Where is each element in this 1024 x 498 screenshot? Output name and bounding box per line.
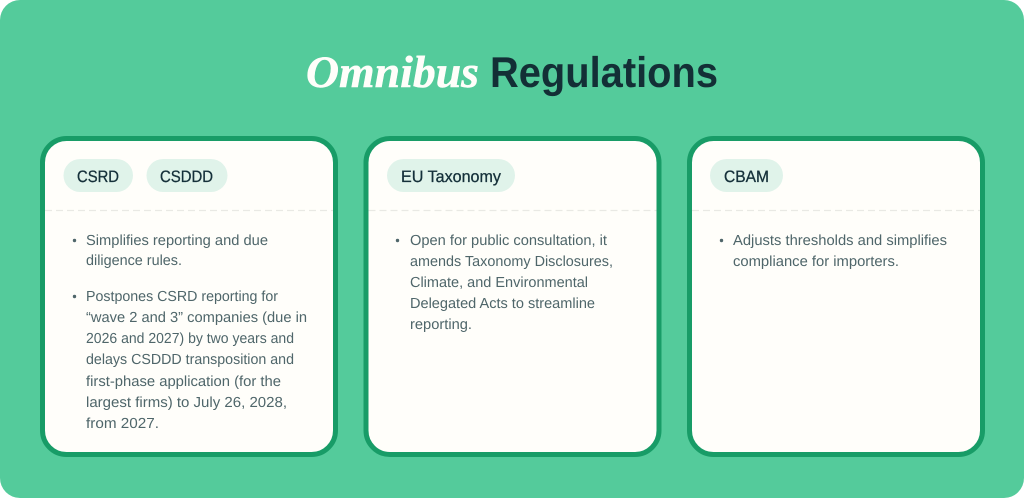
bullet: adjusts thresholds: compliance for importers.: [733, 254, 899, 270]
bullet: postpones CSRD reporting: largest firms) to July 26, 2028,: [86, 395, 287, 411]
bullet: postpones CSRD reporting: 2026 and 2027) by two years and: [86, 331, 294, 347]
bullet: postpones CSRD reporting: Postpones CSRD reporting for: [86, 289, 278, 305]
tag: CSRD: [64, 159, 133, 192]
bullet: public consultation: amends Taxonomy Disclosures,: [410, 254, 613, 270]
bullet: public consultation: Delegated Acts to streamline: [410, 296, 595, 312]
bullet: postpones CSRD reporting: “wave 2 and 3” companies (due in: [86, 310, 307, 326]
title: Regulations: [490, 49, 718, 97]
bullet: public consultation: [396, 233, 613, 333]
bullet: adjusts thresholds: Adjusts thresholds and simplifies: [733, 233, 947, 249]
bullet: public consultation: Climate, and Environmental: [410, 275, 588, 291]
bullet: postpones CSRD reporting: delays CSDDD transposition and: [86, 352, 294, 368]
bullet: simplifies reporting: Simplifies reporting and due: [86, 233, 268, 249]
bullet: public consultation: reporting.: [410, 317, 472, 333]
bullet: postpones CSRD reporting: [73, 289, 307, 432]
tag: CBAM: CBAM: [724, 168, 769, 186]
tag: EU Taxonomy: [387, 159, 515, 192]
bullet: postpones CSRD reporting: from 2027.: [86, 416, 159, 432]
title: Omnibus: [306, 47, 479, 97]
tag: CBAM: [710, 159, 783, 192]
bullet: adjusts thresholds: [720, 233, 947, 270]
panel: EU Taxonomy: [366, 138, 659, 454]
tag: EU Taxonomy: EU Taxonomy: [401, 168, 502, 186]
bullet: simplifies reporting: diligence rules.: [86, 253, 182, 269]
bullet: postpones CSRD reporting: first-phase application (for the: [86, 374, 281, 390]
title: [306, 47, 718, 97]
bullet: simplifies reporting: [73, 233, 268, 269]
panel: CBAM: [690, 138, 982, 454]
tag: CSDDD: [146, 159, 228, 192]
tag: CSRD: CSRD: [77, 168, 119, 186]
panel: CSRD and CSDDD: [42, 138, 336, 454]
tag: CSDDD: CSDDD: [160, 168, 213, 186]
bullet: public consultation: Open for public consultation, it: [410, 233, 607, 249]
